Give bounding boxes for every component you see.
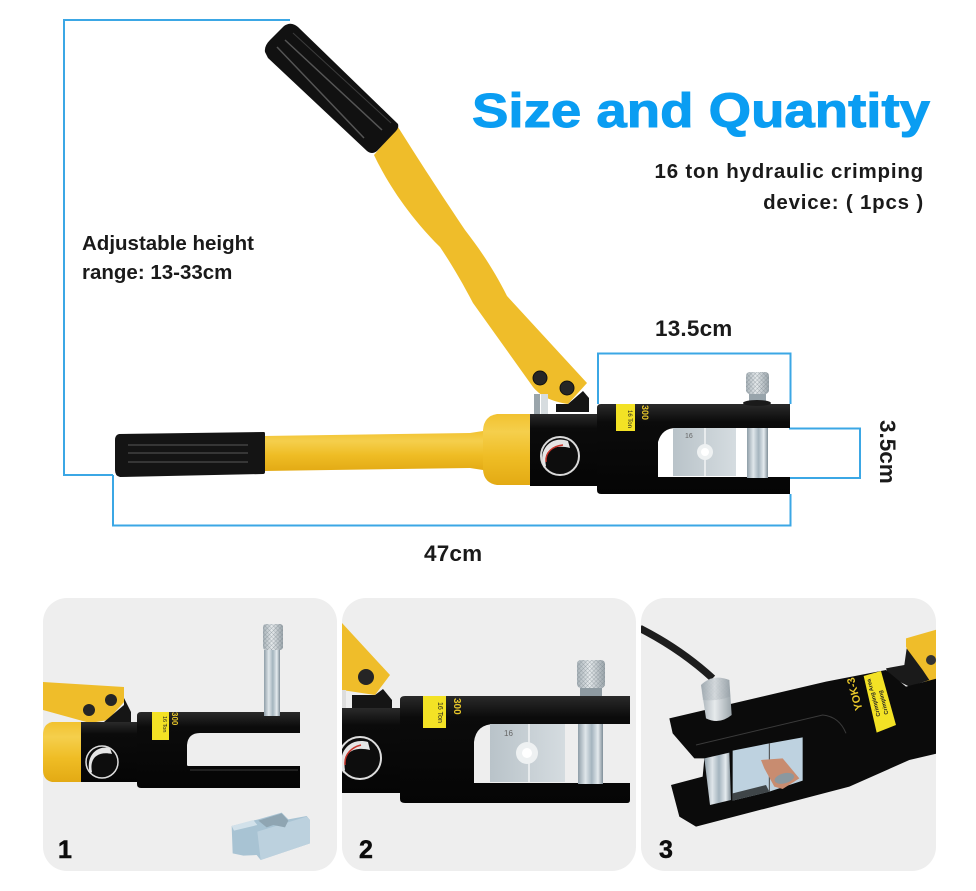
cylinder	[81, 722, 141, 782]
label: adjustable height: range: 13-33cm	[82, 261, 232, 284]
panel 2	[339, 598, 636, 871]
description: tool quantity	[655, 160, 924, 214]
black body	[669, 670, 938, 827]
die	[490, 724, 565, 782]
label: 16 Ton	[161, 716, 167, 732]
cylinder	[342, 708, 404, 793]
locking pin shaft	[747, 428, 768, 478]
dimension lines: height bracket	[64, 20, 290, 475]
panel 3	[640, 598, 944, 871]
head label: 300	[640, 405, 650, 420]
head	[400, 696, 630, 803]
lever	[342, 623, 390, 695]
lever pivot rods and bracket	[534, 391, 589, 416]
dimension lines: overall length bracket	[113, 475, 790, 526]
arm highlight	[696, 715, 846, 745]
label: 16 Ton	[436, 702, 443, 723]
tool in perspective	[640, 627, 944, 827]
label: 47cm: 47cm	[424, 541, 482, 566]
crimping die: 16	[685, 433, 693, 440]
yellow oil cap	[483, 414, 530, 485]
yellow label: Crimping Area	[866, 677, 882, 717]
description: tool quantity: 16 ton hydraulic crimping	[655, 160, 924, 183]
label: 3.5cm: 3.5cm	[875, 420, 900, 484]
crimp die block	[232, 813, 310, 860]
upper yellow lever	[374, 127, 587, 404]
die	[733, 737, 803, 801]
head label	[616, 404, 650, 431]
number 3: 3	[659, 836, 673, 864]
crimping die	[673, 428, 736, 476]
oil cap	[43, 722, 81, 782]
lever bracket	[886, 648, 929, 687]
upper black grip	[265, 24, 398, 153]
pin knob	[701, 678, 732, 721]
pin knob	[577, 660, 605, 696]
lever pins	[83, 694, 117, 716]
lever	[906, 630, 936, 682]
label: 300	[451, 698, 462, 715]
die: 16	[504, 729, 513, 738]
label: 13.5cm: 13.5cm	[655, 316, 733, 341]
dimension lines: head length bracket	[598, 354, 790, 404]
yellow label: YOK-3	[845, 676, 866, 712]
dimension lines: jaw opening bracket	[789, 428, 860, 478]
label	[423, 696, 462, 728]
black pump cylinder	[530, 414, 600, 486]
lever	[43, 682, 124, 723]
title: Size and Quantity	[472, 85, 930, 138]
locking pin knob	[743, 372, 771, 406]
release valve gauge	[541, 437, 579, 475]
crimping head	[597, 404, 790, 494]
description: tool quantity: device: ( 1pcs )	[763, 191, 924, 214]
number 1: 1	[58, 836, 72, 864]
gauge	[339, 737, 381, 779]
number 2: 2	[359, 836, 373, 864]
gauge	[86, 746, 118, 778]
copper lug	[761, 758, 799, 789]
lower black grip	[115, 432, 265, 477]
hose	[640, 628, 713, 678]
lever pins	[533, 371, 574, 395]
lever bolt	[926, 655, 936, 665]
head	[137, 712, 300, 788]
label: adjustable height: Adjustable height	[82, 232, 254, 255]
yellow label: Crimping	[878, 689, 890, 715]
pin	[263, 624, 283, 716]
panel 1	[43, 598, 337, 871]
lever pin	[358, 669, 374, 685]
head label: 16 Ton	[626, 410, 632, 428]
main crimping tool	[115, 24, 790, 494]
lower yellow handle	[263, 431, 483, 471]
yellow label	[845, 671, 896, 733]
pin shaft	[578, 724, 603, 784]
label: 300	[170, 712, 179, 726]
pin shaft	[704, 753, 731, 805]
label: adjustable height	[82, 232, 254, 284]
label	[152, 712, 179, 740]
